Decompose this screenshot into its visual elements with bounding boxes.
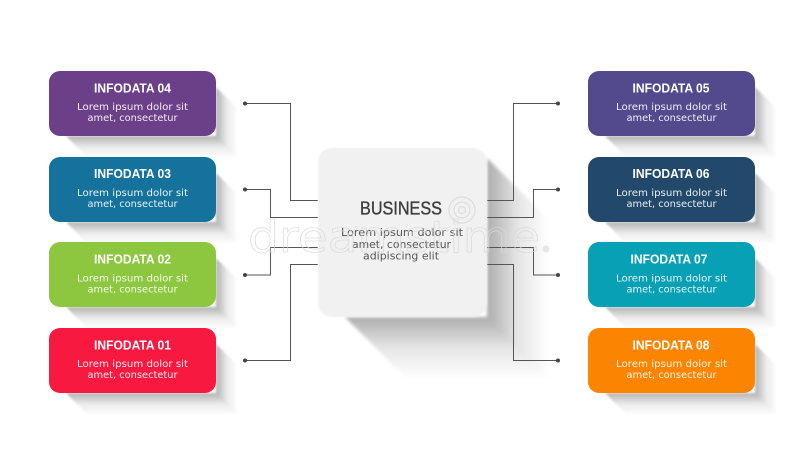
card: infodata 05: INFODATA 05 [632,82,710,96]
card: infodata 08: amet, consectetur [626,370,717,381]
center body text [341,226,464,262]
card: infodata 03: amet, consectetur [88,199,178,210]
watermark: dreamstime [248,212,540,263]
card: infodata 07: INFODATA 07 [630,252,708,266]
card: infodata 08: Lorem ipsum dolor sit [616,359,727,370]
card: infodata 02 [49,242,238,329]
card: infodata 01 [49,328,238,415]
card: infodata 07: amet, consectetur [626,284,717,296]
center body text: adipiscing elit [363,250,440,262]
card: infodata 02: Lorem ipsum dolor sit [77,274,188,284]
card: infodata 03: INFODATA 03 [94,167,171,181]
card: infodata 03: Lorem ipsum dolor sit [77,188,188,199]
card: infodata 07 [588,242,777,329]
card: infodata 05: amet, consectetur [626,113,717,124]
card: infodata 05 [588,71,777,158]
card: infodata 08: INFODATA 08 [632,338,710,352]
center body text: Lorem ipsum dolor sit [341,226,464,239]
card: infodata 06: amet, consectetur [626,199,717,210]
center body text: amet, consectetur [352,238,451,251]
center panel long shadow [345,158,549,379]
connector lines: right side [487,102,560,362]
card: infodata 05: Lorem ipsum dolor sit [616,102,727,113]
watermark [248,197,550,263]
center heading: BUSINESS [360,198,442,218]
card: infodata 01: amet, consectetur [88,370,178,381]
card: infodata 06: INFODATA 06 [632,167,710,181]
center panel: business [318,148,487,317]
card: infodata 02: amet, consectetur [88,284,178,296]
card: infodata 01: INFODATA 01 [94,338,171,352]
card: infodata 02: INFODATA 02 [94,252,171,266]
card: infodata 03 [49,157,238,244]
card: infodata 06: Lorem ipsum dolor sit [616,188,727,199]
card: infodata 08 [588,328,777,415]
card: infodata 04 [49,71,238,158]
card: infodata 07: Lorem ipsum dolor sit [616,274,727,284]
card: infodata 06 [588,157,777,244]
connector lines: left side [243,102,318,362]
card: infodata 04: Lorem ipsum dolor sit [77,102,188,113]
card: infodata 01: Lorem ipsum dolor sit [77,359,188,370]
card: infodata 04: amet, consectetur [88,113,178,124]
card: infodata 04: INFODATA 04 [94,82,171,96]
